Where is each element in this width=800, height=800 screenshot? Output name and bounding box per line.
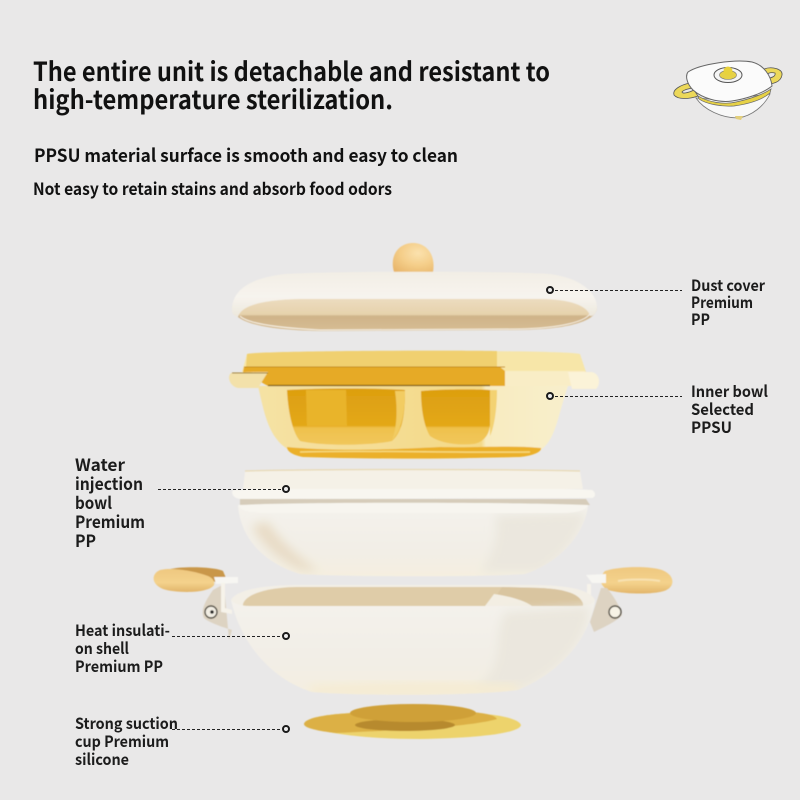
label: dust cover: PP — [691, 308, 710, 330]
shell body — [231, 600, 595, 695]
left compartment — [287, 388, 405, 445]
bowl side tabs — [229, 372, 268, 388]
shell interior — [243, 587, 583, 606]
label: water injection bowl: Water — [75, 452, 126, 476]
label: inner bowl: Selected — [691, 398, 754, 420]
leader: heat insulation shell — [172, 633, 289, 639]
label: heat insulation shell — [75, 619, 170, 677]
lid underside — [232, 298, 597, 331]
icon: right handle — [584, 567, 672, 632]
product: water injection bowl — [232, 469, 595, 576]
bowl flange — [232, 488, 595, 499]
icon: left handle — [154, 567, 238, 640]
label: water injection bowl: bowl — [75, 490, 112, 514]
label: water injection bowl: PP — [75, 528, 96, 552]
bottom band — [287, 447, 541, 458]
shell rim — [231, 585, 595, 608]
label: suction cup: silicone — [75, 748, 129, 770]
label: water injection bowl: Premium — [75, 509, 145, 533]
bowl top ring — [243, 469, 583, 489]
bowl body — [258, 386, 568, 459]
product: dust cover — [232, 243, 597, 331]
label: heat insulation shell: Heat insulati- — [75, 619, 170, 641]
label: dust cover: Premium — [691, 291, 753, 313]
leader: inner bowl — [547, 393, 682, 399]
label: inner bowl — [691, 380, 768, 438]
product: inner bowl — [229, 351, 599, 459]
label: heat insulation shell: Premium PP — [75, 655, 163, 677]
label: suction cup: cup Premium — [75, 730, 169, 752]
title: high-temperature sterilization. — [33, 80, 393, 117]
label: suction cup: Strong suction — [75, 712, 178, 734]
bowl upper rim — [242, 351, 586, 372]
label: water injection bowl: injection — [75, 471, 143, 495]
bowl shoulder — [240, 499, 590, 505]
label: suction cup — [75, 712, 178, 770]
leader: water injection bowl — [158, 486, 289, 492]
subheading: material surface: PPSU material surface is smooth and easy to clean — [34, 142, 458, 168]
icon: lid knob — [393, 243, 434, 272]
label: heat insulation shell: on shell — [75, 637, 129, 659]
subheading: stains and odors: Not easy to retain stains and absorb food odors — [33, 176, 392, 200]
right compartment — [421, 389, 490, 445]
product: suction cup — [304, 704, 521, 739]
label: water injection bowl — [75, 452, 145, 552]
leader: dust cover — [547, 287, 682, 293]
label: inner bowl: PPSU — [691, 416, 732, 438]
product: heat insulation shell — [154, 567, 672, 696]
title: The entire unit is detachable and resistant to — [33, 52, 550, 89]
leader: suction cup — [172, 726, 289, 732]
label: dust cover — [691, 274, 765, 330]
bowl body — [238, 506, 588, 576]
label: dust cover: Dust cover — [691, 274, 765, 296]
label: inner bowl: Inner bowl — [691, 380, 768, 402]
icon: assembled bowl line drawing — [674, 61, 782, 120]
lid dome — [232, 272, 597, 317]
title — [33, 52, 550, 117]
